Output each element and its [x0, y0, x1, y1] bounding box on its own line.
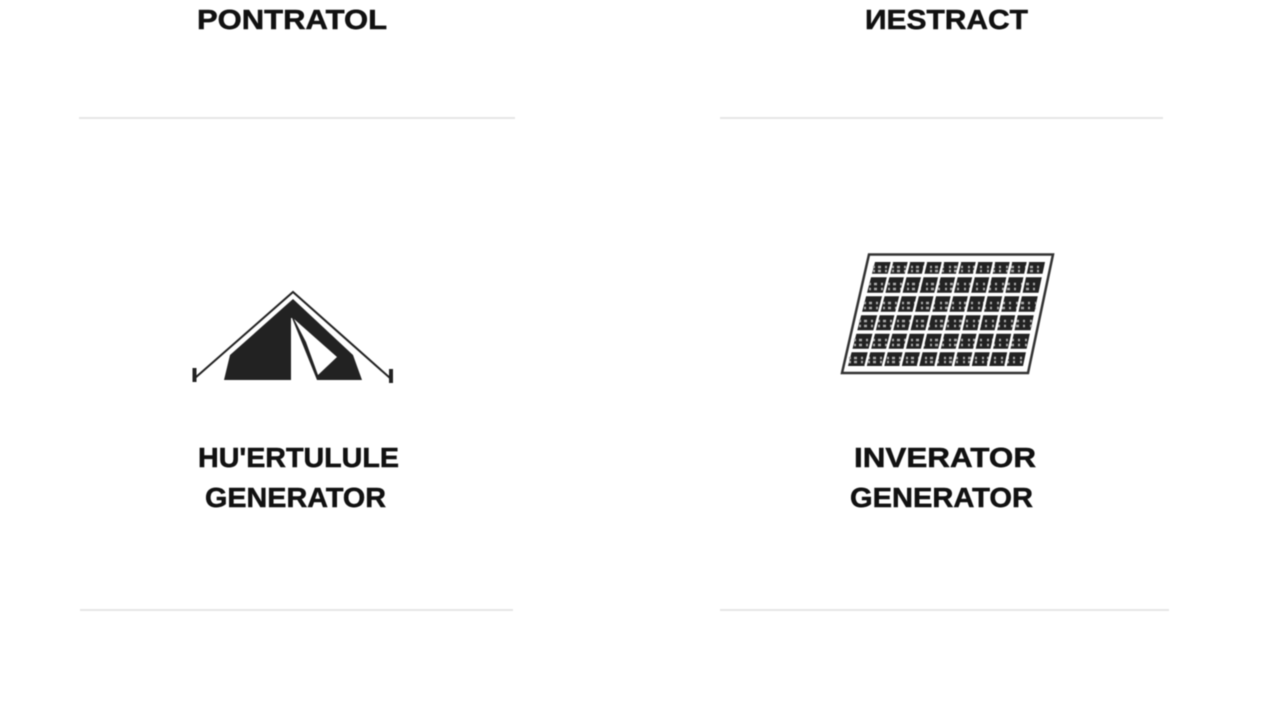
label: left generator: GENERATOR [205, 482, 386, 513]
icon: solar panel [842, 254, 1053, 373]
icon: tent [192, 292, 393, 383]
label: left generator: HU'ERTULULE [198, 442, 399, 473]
label: right generator: GENERATOR [850, 482, 1033, 513]
heading: top right: ИESTRACT [865, 4, 1028, 35]
label: right generator: INVERATOR [854, 442, 1036, 473]
heading: top left: PONTRATOL [197, 4, 387, 35]
label: left generator [198, 442, 399, 513]
label: right generator [850, 442, 1036, 513]
